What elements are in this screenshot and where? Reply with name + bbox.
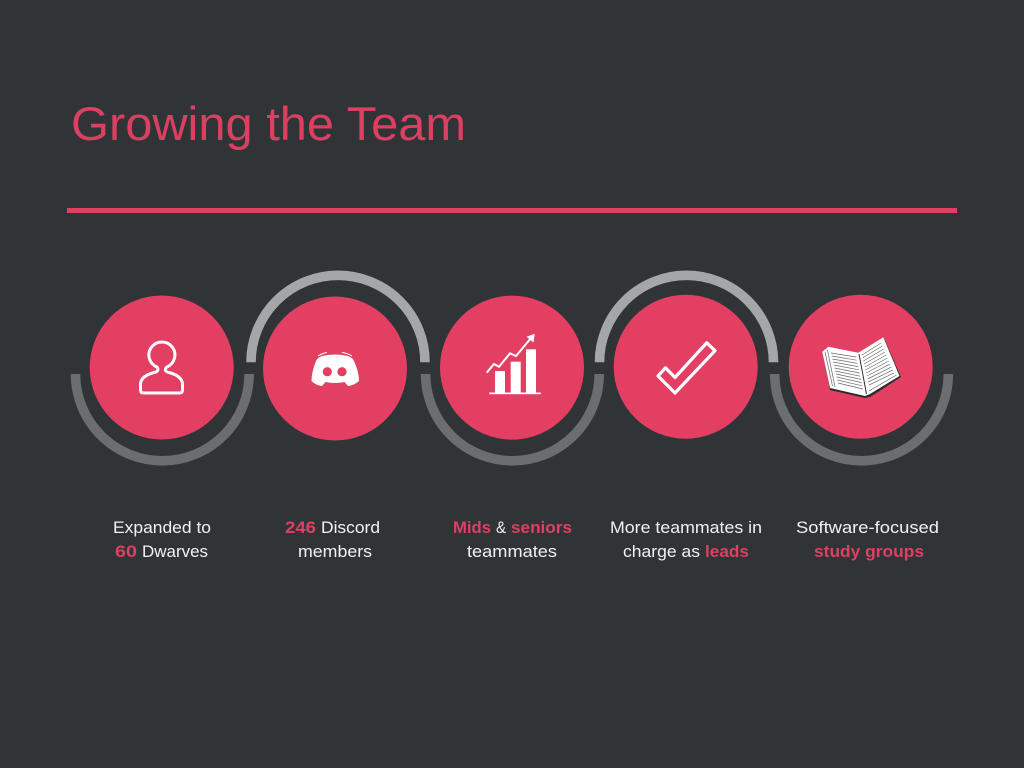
label: step 2 xyxy=(285,518,380,561)
step 3: seniority xyxy=(426,296,599,561)
arc: step 5 xyxy=(775,374,948,461)
title: Growing the Team xyxy=(71,97,466,150)
label: step 1: 60 xyxy=(115,542,137,561)
circle: step 1 xyxy=(90,296,234,440)
label: step 2: members xyxy=(298,542,372,561)
label: step 1: Dwarves xyxy=(142,542,208,561)
label: step 5 xyxy=(796,518,939,561)
label: step 5: study groups xyxy=(814,542,924,561)
circle: step 3 xyxy=(440,296,584,440)
label: step 3: Mids xyxy=(453,518,491,537)
label: step 4: charge as xyxy=(623,542,700,561)
icon: discord logo xyxy=(312,352,359,386)
label: step 3: & xyxy=(496,518,507,537)
label: step 2: Discord xyxy=(321,518,380,537)
label: step 3 xyxy=(453,518,572,561)
icon: person xyxy=(140,342,182,393)
step 2: discord xyxy=(251,275,425,561)
circle: step 5 xyxy=(789,295,933,439)
label: step 3: seniors xyxy=(511,518,572,537)
label: step 4: More teammates in xyxy=(610,518,762,537)
step 4: leads xyxy=(600,275,774,561)
arc: step 4 xyxy=(600,275,774,362)
label: step 1 xyxy=(113,518,211,561)
label: step 2: 246 xyxy=(285,518,316,537)
label: step 1: Expanded to xyxy=(113,518,211,537)
arc: step 2 xyxy=(251,275,425,362)
label: step 3: teammates xyxy=(467,542,557,561)
arc: step 1 xyxy=(76,374,249,461)
step 1: team size xyxy=(76,296,249,561)
icon: check mark xyxy=(658,343,715,393)
label: step 5: Software-focused xyxy=(796,518,939,537)
circle: step 2 xyxy=(263,296,407,440)
icon: growth chart xyxy=(487,334,541,394)
label: step 4 xyxy=(610,518,762,561)
arc: step 3 xyxy=(426,374,599,461)
circle: step 4 xyxy=(614,295,758,439)
label: step 4: leads xyxy=(705,542,749,561)
step 5: study groups xyxy=(775,295,948,561)
icon: open book xyxy=(822,337,901,398)
